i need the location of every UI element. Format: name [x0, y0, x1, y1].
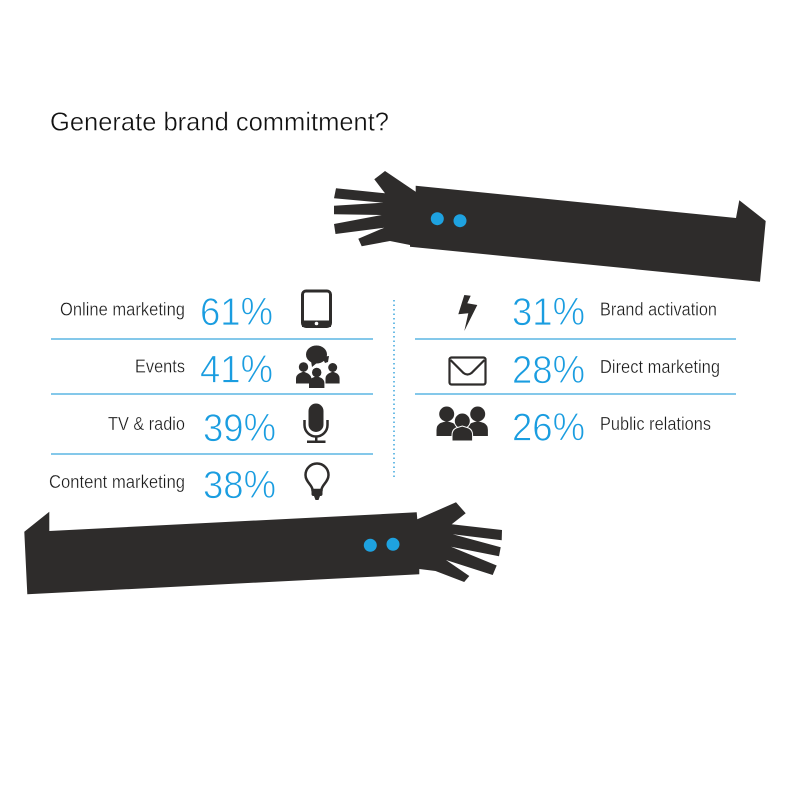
row: content marketing	[49, 464, 328, 507]
row: direct marketing: 28%	[512, 349, 585, 392]
row: brand activation	[458, 291, 717, 334]
row: online marketing	[60, 291, 331, 334]
row: content marketing: 38%	[203, 464, 276, 507]
row: tv and radio: TV & radio	[108, 414, 185, 434]
panel: left column statistics	[49, 291, 373, 507]
row: tv and radio: 39%	[203, 407, 276, 450]
row: brand activation: Brand activation	[600, 300, 717, 320]
row: events: Events	[135, 356, 185, 376]
row: events: 41%	[200, 348, 273, 392]
title: Generate brand commitment?	[50, 106, 389, 136]
row: direct marketing: Direct marketing	[600, 357, 720, 377]
row: brand activation: 31%	[512, 291, 585, 334]
divider: dotted vertical	[393, 300, 395, 477]
illustration: lower arm	[24, 502, 502, 594]
panel: right column statistics	[415, 291, 736, 450]
row: public relations: Public relations	[600, 414, 711, 434]
row: public relations	[436, 406, 711, 450]
row: online marketing: Online marketing	[60, 300, 185, 320]
row: public relations: 26%	[512, 406, 585, 450]
illustration: upper arm	[334, 171, 766, 282]
row: content marketing: Content marketing	[49, 472, 185, 492]
row: events	[135, 346, 340, 392]
row: direct marketing	[450, 349, 720, 392]
row: online marketing: 61%	[200, 291, 273, 334]
row: tv and radio	[108, 404, 328, 450]
